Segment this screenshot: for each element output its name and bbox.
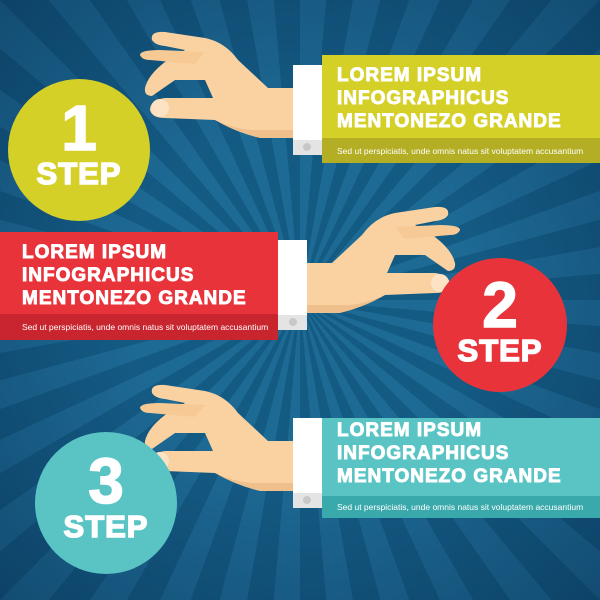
- panel 3 heading: MENTONEZO GRANDE: [337, 466, 562, 487]
- panel 2 heading: INFOGRAPHICUS: [22, 265, 194, 286]
- panel 1 heading: LOREM IPSUM: [337, 65, 482, 86]
- panel 2 caption: [0, 314, 278, 340]
- panel 3 caption: [322, 496, 600, 518]
- panel 1 heading: [337, 65, 562, 132]
- circle 1: STEP: [37, 156, 121, 191]
- panel 3 heading: INFOGRAPHICUS: [337, 443, 509, 464]
- hand 2: [278, 207, 460, 330]
- panel 1 caption: [322, 138, 600, 163]
- hand 1: [140, 32, 322, 155]
- circle 1: [8, 79, 150, 221]
- panel 3 heading: [337, 420, 562, 487]
- panel 2: [0, 232, 278, 340]
- panel 2 heading: MENTONEZO GRANDE: [22, 288, 247, 309]
- circle 2: 2: [482, 269, 518, 341]
- panel 2 heading: [22, 242, 247, 309]
- circle 2: [433, 258, 567, 392]
- hand 3: [140, 385, 322, 508]
- panel 3 caption: Sed ut perspiciatis, unde omnis natus sit voluptatem accusantium: [337, 502, 583, 512]
- circle 1: 1: [61, 92, 97, 164]
- circle 2: STEP: [458, 333, 542, 368]
- panel 3 heading: LOREM IPSUM: [337, 420, 482, 441]
- circle 3: 3: [88, 445, 124, 517]
- panel 1 heading: INFOGRAPHICUS: [337, 88, 509, 109]
- panel 2 caption: Sed ut perspiciatis, unde omnis natus sit voluptatem accusantium: [22, 322, 268, 332]
- panel 1 heading: MENTONEZO GRANDE: [337, 111, 562, 132]
- panel 2 heading: LOREM IPSUM: [22, 242, 167, 263]
- panel 3: [322, 418, 600, 518]
- panel 1: [322, 55, 600, 163]
- circle 3: [35, 432, 177, 574]
- circle 3: STEP: [64, 509, 148, 544]
- panel 1 caption: Sed ut perspiciatis, unde omnis natus sit voluptatem accusantium: [337, 146, 583, 156]
